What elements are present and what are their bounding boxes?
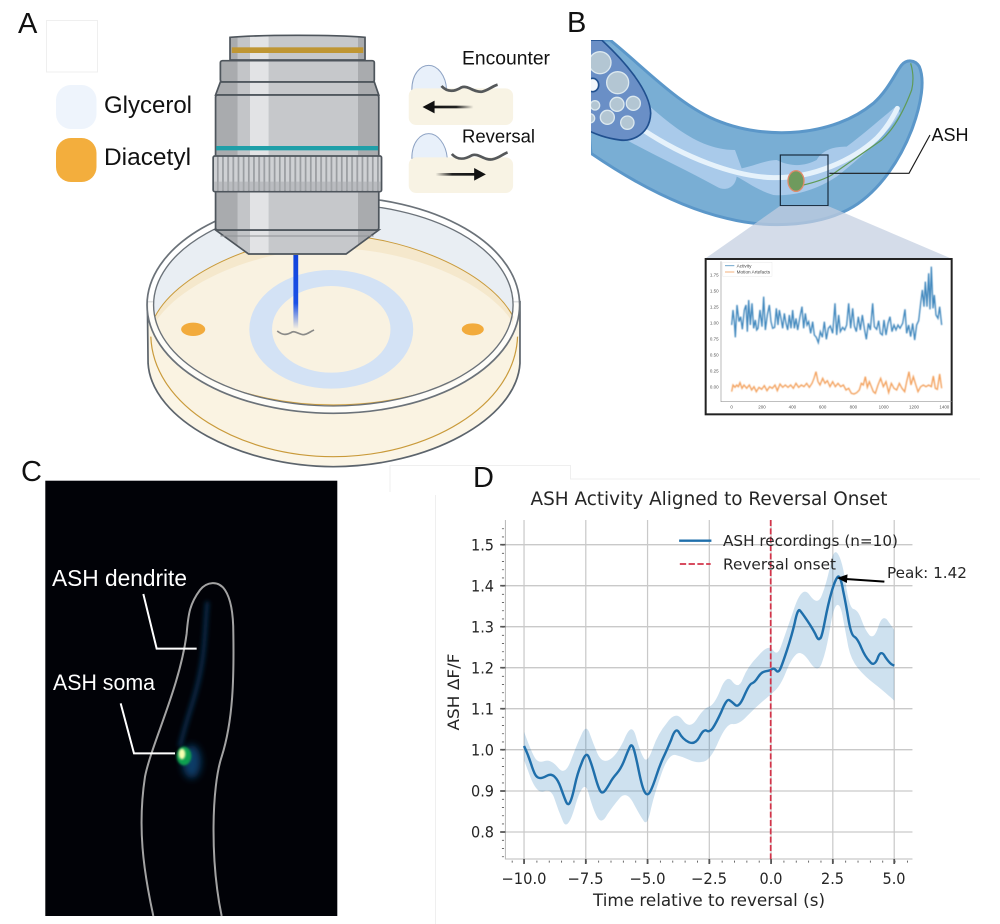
inset x ticks: 200 xyxy=(758,405,766,410)
y tick labels: 1.3 xyxy=(471,618,494,636)
legend: glycerol: Glycerol xyxy=(104,92,192,119)
x tick labels: −5.0 xyxy=(630,869,666,888)
inset y ticks: 1.00 xyxy=(710,321,719,326)
inset legend xyxy=(723,262,772,276)
panel letter A: A xyxy=(18,8,38,40)
inset legend: Activity xyxy=(737,263,752,268)
head bulb xyxy=(591,40,652,142)
inset y ticks: 0.50 xyxy=(710,353,719,358)
y tick labels: 0.9 xyxy=(471,782,494,800)
y tick labels: 1.1 xyxy=(471,700,494,718)
x tick labels: −2.5 xyxy=(691,869,727,888)
legend lines xyxy=(679,541,711,564)
label: ASH soma: ASH soma xyxy=(53,670,156,695)
panel letter B: B xyxy=(567,7,586,39)
legend: diacetyl: Diacetyl xyxy=(104,144,191,171)
error band xyxy=(524,552,894,824)
inset x ticks: 1000 xyxy=(879,405,889,410)
inset y ticks: 1.50 xyxy=(710,288,719,293)
petri dish xyxy=(147,197,520,467)
legend placeholder box xyxy=(46,20,98,72)
mean trace xyxy=(524,577,894,804)
inset x ticks: 400 xyxy=(789,405,797,410)
label: ASH: ASH xyxy=(932,125,968,145)
x axis label: Time relative to reversal (s) xyxy=(592,891,825,911)
ASH dendrite xyxy=(803,63,913,185)
intestine band xyxy=(627,106,900,195)
reversal onset line xyxy=(768,520,773,859)
zoom box xyxy=(780,155,828,206)
dendrite glow xyxy=(180,602,207,747)
inset x ticks: 0 xyxy=(730,405,733,410)
panel B: worm anatomy and trace xyxy=(567,7,968,414)
y tick labels: 1.5 xyxy=(471,536,494,554)
panel letter C: C xyxy=(21,456,42,488)
label: reversal: Reversal xyxy=(462,126,535,146)
inset x ticks: 800 xyxy=(850,405,858,410)
y tick labels xyxy=(471,536,494,842)
chart title: ASH Activity Aligned to Reversal Onset xyxy=(530,489,888,510)
encounter inset xyxy=(409,65,513,125)
inset y ticks xyxy=(710,272,719,390)
y axis label: ASH ΔF/F xyxy=(444,654,463,730)
soma pointer xyxy=(121,703,175,753)
panel letter D: D xyxy=(473,462,494,494)
glycerol ring xyxy=(249,270,413,389)
inset y ticks: 0.00 xyxy=(710,385,719,390)
label: encounter: Encounter xyxy=(462,48,551,70)
x tick labels: 2.5 xyxy=(821,869,844,888)
activity trace xyxy=(732,267,942,343)
inset x ticks xyxy=(730,405,950,410)
legend: ASH recordings: ASH recordings (n=10) xyxy=(723,532,898,550)
inset y ticks: 1.75 xyxy=(710,272,719,277)
inset x ticks: 1200 xyxy=(909,405,919,410)
panel C: fluorescence micrograph xyxy=(45,481,337,916)
inset x ticks: 600 xyxy=(819,405,827,410)
worm on plate xyxy=(277,330,314,335)
ASH soma xyxy=(788,171,804,191)
y tick labels: 1.4 xyxy=(471,576,494,596)
inset legend: Motion Artefacts xyxy=(737,270,771,275)
axis spines and ticks xyxy=(500,520,912,864)
panel D: aligned activity chart xyxy=(444,462,967,911)
legend: diacetyl xyxy=(56,138,191,182)
gridlines xyxy=(505,520,912,859)
peak annotation: Peak: 1.42 xyxy=(887,564,967,582)
y tick labels: 1.0 xyxy=(471,740,494,760)
x tick labels: −10.0 xyxy=(502,869,546,888)
inset y ticks: 0.75 xyxy=(710,337,719,342)
microscope objective xyxy=(213,35,382,254)
y tick labels: 0.8 xyxy=(471,822,494,842)
dendrite pointer xyxy=(143,594,197,649)
inset y ticks: 1.25 xyxy=(710,305,719,310)
peak arrow xyxy=(837,574,884,583)
legend: glycerol xyxy=(56,85,192,129)
plot area xyxy=(500,520,912,864)
worm outline xyxy=(142,583,234,916)
legend: reversal onset: Reversal onset xyxy=(723,556,836,574)
y tick labels: 1.2 xyxy=(471,658,494,678)
blue light beam xyxy=(293,255,298,329)
reversal inset xyxy=(409,134,513,193)
panel A: experiment setup xyxy=(18,8,551,467)
inset x ticks: 1400 xyxy=(939,405,950,410)
label: ASH dendrite: ASH dendrite xyxy=(52,565,187,591)
soma glow xyxy=(177,745,201,778)
x tick labels: 0.0 xyxy=(760,869,782,888)
x tick labels xyxy=(502,869,906,888)
x tick labels: 5.0 xyxy=(882,869,906,888)
diacetyl spots xyxy=(181,323,205,336)
x tick labels: −7.5 xyxy=(568,869,604,888)
ASH callout line xyxy=(829,135,930,173)
inset y ticks: 0.25 xyxy=(710,369,719,374)
worm illustration xyxy=(580,40,930,225)
motion artefact trace xyxy=(732,372,942,394)
inset activity trace chart xyxy=(706,259,952,414)
zoom projection wedge xyxy=(706,206,950,258)
panel D frame edges xyxy=(390,466,980,924)
